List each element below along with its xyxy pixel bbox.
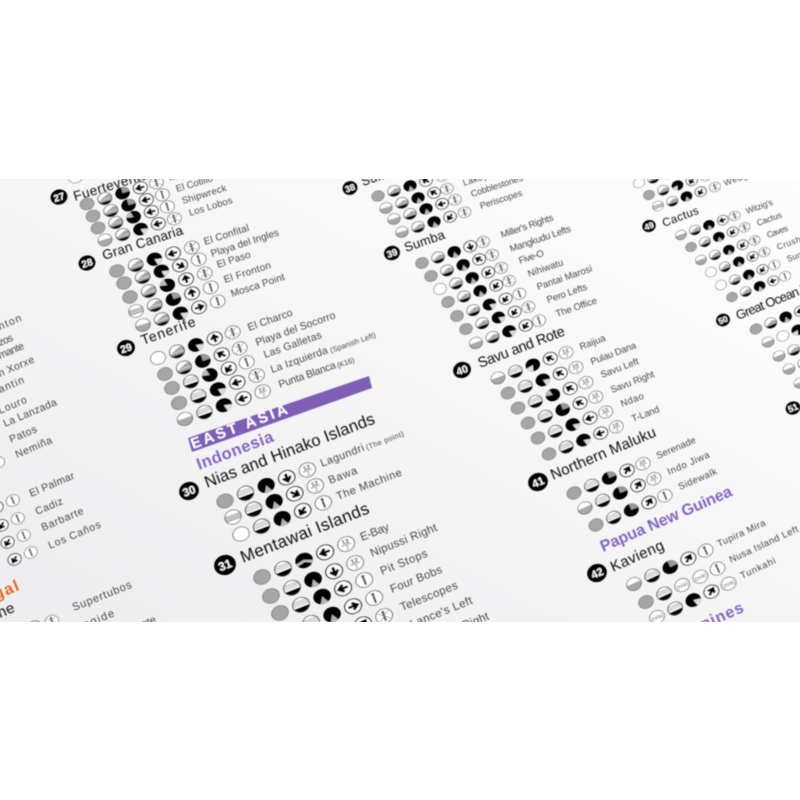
spot names: El Fronton xyxy=(223,260,273,286)
row: Periscopes xyxy=(394,205,472,240)
badge 28: 28 xyxy=(80,257,95,271)
spot names: Los Lobos xyxy=(188,195,234,219)
section: Kavieng xyxy=(584,517,800,627)
row: Mosca Point xyxy=(133,293,227,335)
spot names: Serenade xyxy=(655,435,698,462)
spot names: Nusa Island Left xyxy=(728,524,800,566)
badge 51: 51 xyxy=(786,401,800,415)
spot names: Majanicho xyxy=(168,160,213,184)
spot names: Lance's Right xyxy=(420,610,492,649)
spot names: (The point) xyxy=(364,429,406,452)
heading: Philippines: Philippines xyxy=(653,599,746,654)
row: Cobblestones xyxy=(386,193,463,227)
row xyxy=(748,304,800,337)
spot names: Four Bobs xyxy=(389,564,444,596)
badge 29 xyxy=(116,339,136,357)
spot names: Las Galletas xyxy=(262,329,324,361)
spot names: El Cotillo xyxy=(175,173,214,195)
section: left column spot names: Los Caños xyxy=(46,519,103,552)
row: La Izquierda xyxy=(169,366,267,413)
badge 30: 30 xyxy=(181,484,197,500)
spot names xyxy=(319,429,406,503)
poster paper band xyxy=(0,179,800,622)
spot names xyxy=(716,517,800,582)
heading: Papua New Guinea: Papua New Guinea xyxy=(598,483,735,556)
row: Savu Left xyxy=(509,374,595,417)
section: Sumba xyxy=(382,212,599,351)
spot names: Supertubos xyxy=(71,579,134,614)
badge 27: 27 xyxy=(52,191,67,205)
spot names: T-Land xyxy=(630,404,661,425)
row: Witzig's xyxy=(674,209,742,242)
row: Five-O xyxy=(432,260,509,297)
row: Pit Stops xyxy=(269,570,375,624)
row: Mangkudu Lefts xyxy=(423,247,500,284)
spot names: Punta Blanca xyxy=(277,359,338,391)
badge 50: 50 xyxy=(717,313,730,326)
section: left column spot names: El Palmar xyxy=(27,470,77,500)
spot names: Witzig's xyxy=(744,197,774,216)
spot names: Cobblestones xyxy=(470,173,524,199)
spot names xyxy=(499,212,599,320)
row: Savu Right xyxy=(519,389,605,432)
row: E-Bay xyxy=(251,534,357,588)
title: Northern Maluku xyxy=(548,424,659,484)
section: Gran Canaria xyxy=(77,222,286,335)
row: Pantai Marosi xyxy=(449,286,528,324)
section: Sumbawa xyxy=(341,158,524,240)
row: Playa del Socorro xyxy=(156,340,249,384)
spot names: Bawa xyxy=(327,465,360,487)
spot names xyxy=(462,163,524,211)
row xyxy=(781,356,800,377)
row: Sidewalk xyxy=(587,487,675,535)
spot names xyxy=(170,179,233,216)
row: Las Galletas xyxy=(163,354,256,398)
spot names: Nipussi Right xyxy=(369,522,440,560)
row: Indo Jiwa xyxy=(575,470,664,518)
spot names: Playa del Ingles xyxy=(210,227,280,260)
badge 41 xyxy=(525,470,551,494)
spot names xyxy=(203,223,286,300)
spot names: Raijua xyxy=(578,333,608,353)
badge 41: 41 xyxy=(530,475,546,491)
spot names: The Office xyxy=(554,295,599,320)
title: Tenerife xyxy=(139,313,198,348)
row: Tupira Mira xyxy=(624,541,716,595)
row: Shipwreck xyxy=(89,199,176,237)
row: El Charco xyxy=(149,324,242,368)
section: Tenerife xyxy=(115,307,377,429)
spot names: Ndao xyxy=(619,391,645,410)
section: Portugal xyxy=(0,578,156,622)
title: Kavieng xyxy=(608,537,667,576)
section: left column spot names: La Lanzada xyxy=(1,396,59,430)
title: Sumba xyxy=(402,227,447,255)
row: Pulau Dana xyxy=(499,359,585,402)
badge 31: 31 xyxy=(216,556,234,574)
spot names: Shipwreck xyxy=(181,183,228,207)
row: Nusa Island Left xyxy=(636,560,728,612)
section: Great Ocean Road xyxy=(714,272,800,390)
section: Northern Maluku xyxy=(525,424,719,535)
badge 38: 38 xyxy=(344,182,356,194)
icon row xyxy=(30,614,60,622)
badge 30 xyxy=(178,481,200,501)
title: Mentawai Islands xyxy=(238,499,372,567)
spot names: El Paso xyxy=(216,249,253,271)
badge 29: 29 xyxy=(119,341,134,356)
spot names: ate xyxy=(140,614,158,631)
row: El Confital xyxy=(108,239,201,281)
row: Bawa xyxy=(222,476,326,528)
row xyxy=(771,343,800,364)
spot name: Wedge xyxy=(722,169,754,188)
row: Suns xyxy=(714,258,781,292)
row: Pero Lefts xyxy=(458,299,537,337)
spot names: E-Bay xyxy=(359,521,391,544)
spot names xyxy=(72,582,156,622)
poster content xyxy=(0,179,800,622)
row: Ndao xyxy=(529,404,615,447)
spot names: Pulau Dana xyxy=(589,340,639,368)
section: top right rows xyxy=(632,167,754,213)
row: Telescopes xyxy=(289,606,395,660)
badge 49 xyxy=(641,218,657,234)
badge 39 xyxy=(382,244,402,262)
row: Lakey Peak xyxy=(378,182,455,216)
row xyxy=(760,323,800,349)
badge 51 xyxy=(784,399,800,417)
badge 42: 42 xyxy=(589,566,605,582)
spot names: Pero Lefts xyxy=(545,282,589,306)
preceding row fragment xyxy=(67,179,83,184)
title: Fuerteventura xyxy=(71,163,162,204)
title: Savu and Rote xyxy=(476,324,567,372)
badge 28 xyxy=(78,254,96,272)
section: Cactus xyxy=(641,197,800,304)
icons: left column partial rows xyxy=(0,456,39,567)
spot names: Lance's Left xyxy=(409,595,475,631)
row: The Office xyxy=(467,313,547,351)
section: left column spot names: Nemiña xyxy=(13,434,54,461)
spot names xyxy=(744,197,800,264)
spot names: Savu Left xyxy=(599,356,641,381)
badge 40 xyxy=(451,359,473,381)
badge 42 xyxy=(584,561,610,585)
spot names: Telescopes xyxy=(399,580,460,614)
row: Crushers xyxy=(704,245,771,279)
spot names: Five-O xyxy=(517,248,546,267)
row: Miller's Rights xyxy=(414,234,491,271)
section: left column spot names: Patos xyxy=(7,423,39,446)
badge 39: 39 xyxy=(386,247,399,261)
spot names: Pantai Marosi xyxy=(535,264,594,293)
row xyxy=(370,169,450,204)
row: Raijua xyxy=(489,344,575,388)
section: left column spot names: Barbarte xyxy=(39,505,86,534)
row: El Paso xyxy=(121,265,214,307)
spot names: El Confital xyxy=(203,223,251,248)
spot names xyxy=(246,307,377,391)
spot names xyxy=(359,521,492,649)
row: T-Land xyxy=(540,418,626,463)
row xyxy=(79,179,164,211)
row: Punta Blanca xyxy=(175,382,273,429)
spot names: Miller's Rights xyxy=(499,212,555,241)
spot names: Nihiwatu xyxy=(526,257,565,280)
spot names: Mangkudu Lefts xyxy=(508,224,573,255)
section: Nias and Hinako Islands xyxy=(176,410,406,545)
spot names: Tupira Mira xyxy=(716,517,768,550)
spot names: Caves xyxy=(765,223,789,240)
spot names: Periscopes xyxy=(479,188,524,211)
spot names: Cactus xyxy=(755,210,783,228)
row: El Fronton xyxy=(126,279,220,321)
row: Caves xyxy=(694,234,762,267)
row: Lagundri xyxy=(215,460,318,512)
spot names: (K16) xyxy=(336,355,356,370)
row: The Machine xyxy=(231,493,334,545)
row: Wedge xyxy=(651,180,722,213)
row: Nihiwatu xyxy=(440,273,517,310)
row xyxy=(725,270,792,304)
row fragment xyxy=(632,167,675,190)
row: Cactus xyxy=(684,221,752,254)
banner: East Asia xyxy=(188,376,372,453)
row fragment xyxy=(642,169,713,202)
title: Cactus xyxy=(661,205,701,230)
title: Sumbawa xyxy=(360,158,419,189)
spot names: The Machine xyxy=(335,467,403,503)
spot names: Playa del Socorro xyxy=(254,309,337,349)
badge 49: 49 xyxy=(643,220,655,232)
row: Tunkahi xyxy=(647,574,739,627)
section: Fuerteventura xyxy=(49,160,234,249)
spot names xyxy=(655,435,719,493)
spot names: Pit Stops xyxy=(379,548,430,578)
row: Serenade xyxy=(565,455,653,503)
spot names: Tunkahi xyxy=(739,556,778,582)
row: Playa del Ingles xyxy=(115,251,208,293)
row: Four Bobs xyxy=(279,588,385,642)
spot names: Savu Right xyxy=(609,369,656,396)
section: left column spot names: Cadiz xyxy=(33,495,65,518)
spot names: (Spanish Left) xyxy=(329,330,377,355)
row: Nipussi Right xyxy=(260,553,366,607)
badge 31 xyxy=(211,552,239,578)
badge 38 xyxy=(341,179,359,197)
section: Mentawai Islands xyxy=(211,499,492,660)
row xyxy=(792,376,800,390)
spot names: Sidewalk xyxy=(677,466,719,493)
title: Gran Canaria xyxy=(100,222,185,263)
banner: East Asia: EAST ASIA xyxy=(188,401,290,453)
spot names xyxy=(578,333,661,425)
row: Los Lobos xyxy=(96,211,183,249)
row: El Cotillo xyxy=(84,187,171,225)
section: left column spot names xyxy=(0,312,103,552)
heading: Indonesia: Indonesia xyxy=(194,428,277,474)
badge 40: 40 xyxy=(455,363,470,378)
spot names: Lakey Peak xyxy=(462,163,513,188)
spot names: Lagide xyxy=(75,608,116,634)
badge 27 xyxy=(50,188,68,206)
title: Nias and Hinako Islands xyxy=(202,410,377,492)
spot names: Mosca Point xyxy=(230,272,286,300)
spot names: Indo Jiwa xyxy=(666,449,712,478)
spot names: Lagundri xyxy=(319,442,366,470)
spot names: El Charco xyxy=(246,307,294,334)
section: Savu and Rote xyxy=(451,324,661,463)
spot names: La Izquierda xyxy=(269,344,330,376)
